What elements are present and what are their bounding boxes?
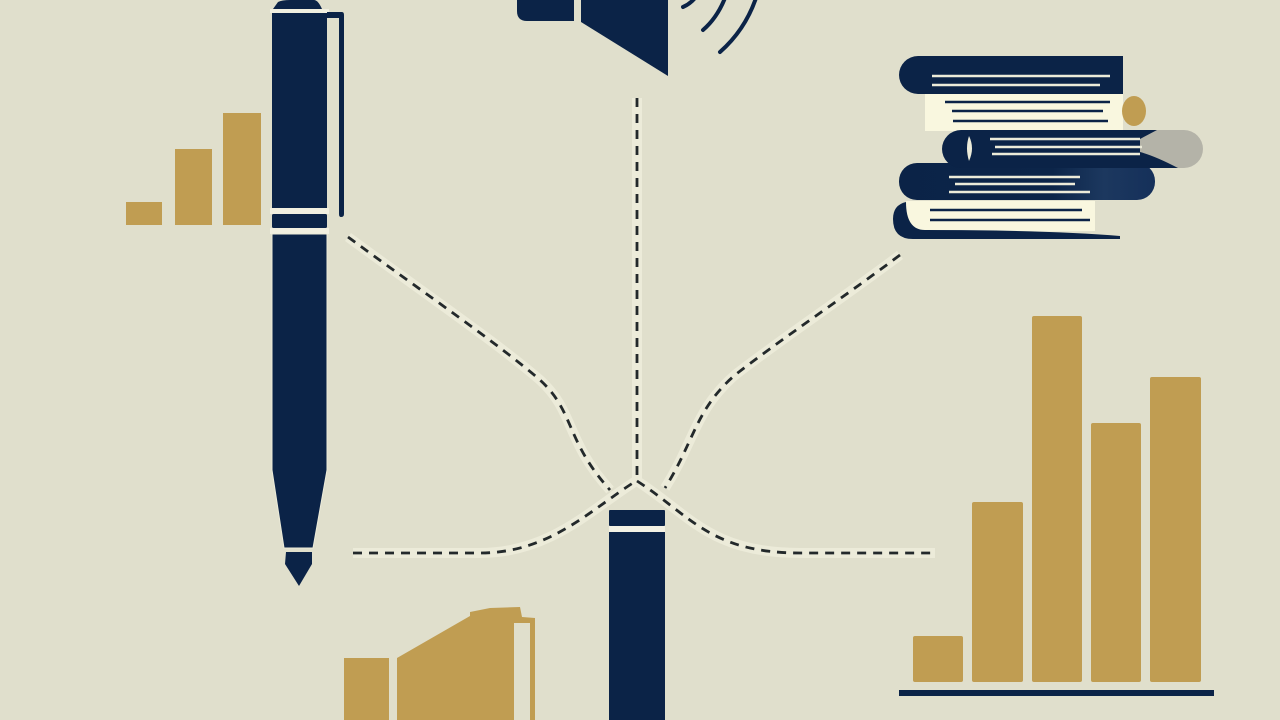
book 3 page lines	[949, 177, 1090, 192]
gold bookmark	[1122, 96, 1146, 126]
book 2 grey end	[1120, 130, 1203, 168]
central pen barrel	[609, 532, 665, 720]
book 1 cover	[899, 56, 1123, 94]
book 2 spine mark and lines	[967, 136, 972, 161]
pen barrel lower	[272, 234, 327, 548]
icon: gold pen and bar silhouette	[344, 607, 535, 720]
chart: small bar chart	[126, 113, 261, 225]
book 4 pages	[906, 201, 1095, 233]
chart: large bar chart	[899, 316, 1214, 696]
pen band	[272, 214, 327, 228]
icon: stack of books	[893, 56, 1203, 239]
icon: large pen	[270, 0, 344, 586]
pen separators	[270, 9, 329, 234]
book 4 page lines	[930, 210, 1090, 220]
icon: central pen	[609, 510, 665, 720]
central pen band	[609, 510, 665, 526]
pen cap top	[273, 0, 322, 9]
sound waves	[683, 0, 756, 52]
icon: speaker with sound waves	[517, 0, 756, 76]
book 1 pages	[925, 92, 1123, 131]
central pen separator	[609, 526, 665, 532]
connector: dashed lines converging on the hub	[348, 98, 935, 553]
book 1 page lines	[932, 76, 1110, 85]
speaker body	[517, 0, 574, 21]
pen nib	[285, 552, 312, 586]
book 2 cover	[942, 130, 1178, 168]
pen barrel upper	[272, 13, 327, 208]
speaker cone	[581, 0, 668, 76]
book 4 cover	[893, 202, 1120, 239]
book 3 cover	[899, 163, 1155, 200]
pen clip	[327, 12, 344, 217]
chart baseline	[899, 690, 1214, 696]
